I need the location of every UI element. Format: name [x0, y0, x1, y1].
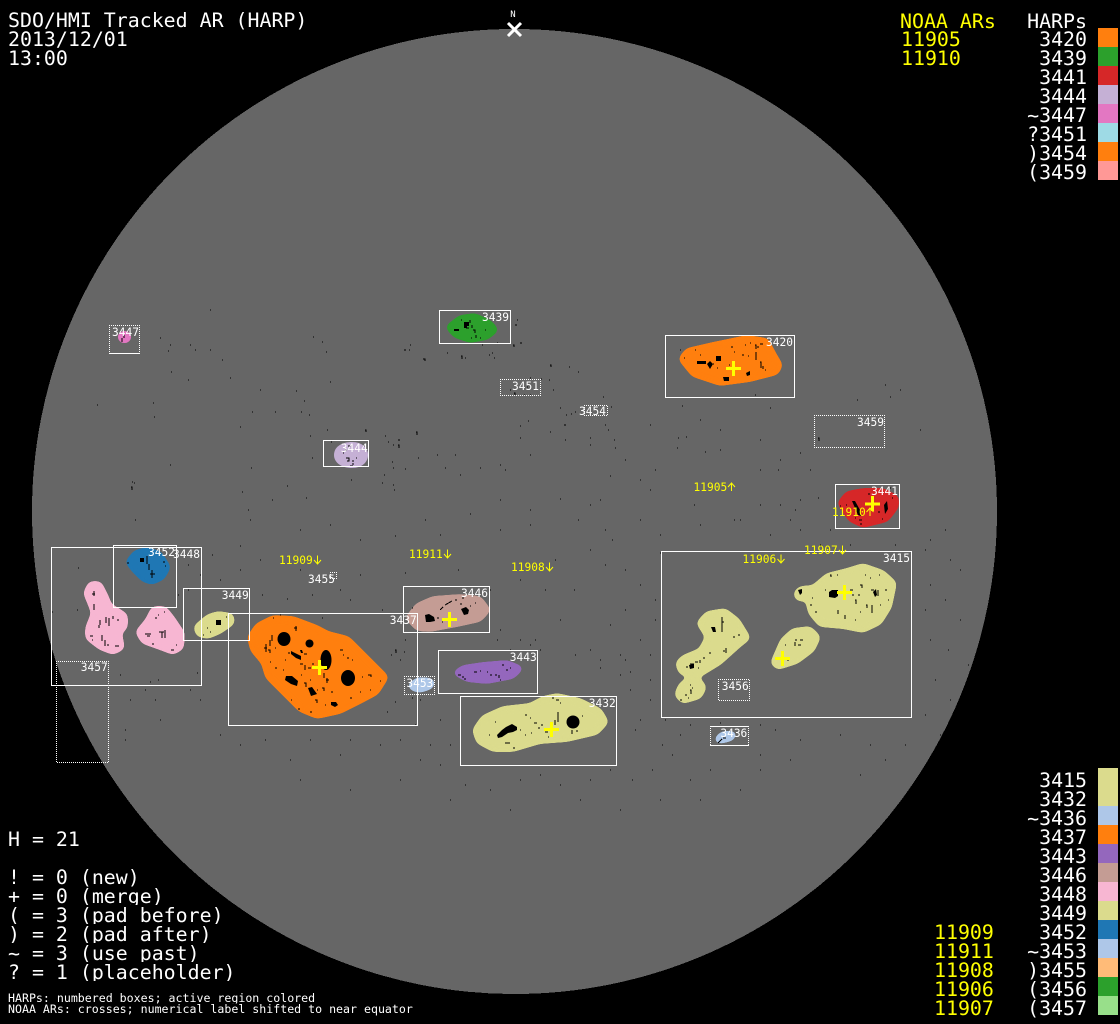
box 3432	[460, 696, 616, 766]
HARP numeric labels: 3447	[112, 326, 139, 339]
HARPs list bottom right: (3457	[1027, 997, 1087, 1020]
box 3447	[109, 326, 140, 354]
NOAA AR labels: 11910	[832, 506, 866, 519]
box 3437	[228, 614, 418, 726]
box 3420	[666, 336, 794, 398]
HARPs list bottom right: (3456	[1027, 978, 1087, 1001]
HARPs list top right: ?3451	[1027, 123, 1087, 146]
HARP numeric labels: 3456	[722, 680, 749, 693]
HARP numeric labels: 3457	[81, 661, 108, 674]
footnote: NOAA ARs: crosses; numerical label shifted to near equator	[8, 1002, 413, 1016]
sunspot specks scattered across disk	[52, 310, 969, 810]
title block: SDO/HMI Tracked AR (HARP)	[8, 9, 307, 32]
yellow cross NOAA 11907	[837, 585, 852, 600]
north pole marker: N	[510, 10, 516, 20]
box 3443	[438, 650, 538, 694]
yellow cross NOAA 11910	[865, 496, 880, 511]
box 3452	[114, 546, 176, 608]
status code key: ! = 0 (new)	[8, 866, 140, 889]
HARP numeric labels	[81, 311, 910, 740]
active region 3446 with yellow cross	[407, 596, 489, 630]
yellow cross	[544, 722, 559, 737]
box 3459	[814, 416, 884, 448]
footnote: HARPs: numbered boxes; active region colored	[8, 991, 315, 1005]
box 3455	[330, 572, 336, 578]
HARP numeric labels: 3444	[341, 442, 368, 455]
HARP numeric labels: 3453	[406, 677, 433, 690]
NOAA ARs list top right	[900, 10, 996, 70]
HARP numeric labels: 3436	[720, 727, 748, 740]
status code key	[0, 866, 240, 986]
active region 3441 with yellow cross	[839, 490, 897, 526]
NOAA label direction arrows	[314, 482, 874, 571]
HARP numeric labels: 3455	[308, 573, 335, 586]
HARPs list top right: 3444	[1039, 85, 1087, 108]
NOAA ARs list bottom right: 11909	[934, 921, 994, 944]
NOAA ARs list bottom right: 11911	[934, 940, 994, 963]
box 3446	[404, 586, 490, 632]
HARP numeric labels: 3452	[148, 546, 175, 559]
H count: H = 21	[8, 828, 80, 851]
HARPs list bottom right: 3446	[1039, 864, 1087, 887]
active region 3447	[118, 331, 131, 343]
HARPs list bottom right: 3443	[1039, 845, 1087, 868]
active region 3449	[195, 613, 233, 637]
HARP numeric labels: 3454	[579, 405, 606, 418]
active region 3443	[454, 662, 522, 682]
HARP numeric labels: 3443	[510, 651, 537, 664]
active region 3453	[409, 679, 433, 691]
north pole marker	[508, 10, 521, 36]
NOAA AR labels: 11907	[804, 544, 838, 557]
HARPs list bottom right: 3437	[1039, 826, 1087, 849]
NOAA AR labels	[279, 481, 866, 574]
cluster specks between regions	[168, 320, 612, 498]
box 3453	[404, 676, 434, 694]
HARPs list bottom right: 3415	[1039, 769, 1087, 792]
footnote	[0, 991, 413, 1016]
HARP numeric labels: 3437	[390, 614, 417, 627]
NOAA AR labels: 11905	[694, 481, 727, 494]
NOAA ARs list top right: 11905	[901, 28, 961, 51]
colour swatches bottom right	[1098, 768, 1118, 1015]
HARP numeric labels: 3451	[512, 380, 539, 393]
HARPs list top right: )3454	[1027, 142, 1087, 165]
NOAA ARs list top right: 11910	[901, 47, 961, 70]
active region 3448	[85, 583, 183, 653]
box 3439	[440, 310, 510, 344]
HARP numeric labels: 3459	[857, 416, 884, 429]
status code key: ( = 3 (pad before)	[8, 904, 224, 927]
HARPs list top right	[1027, 10, 1087, 184]
NOAA AR labels: 11911	[409, 548, 443, 561]
HARPs list bottom right: 3449	[1039, 902, 1087, 925]
NOAA AR labels: 11909	[279, 554, 313, 567]
status code key: ~ = 3 (use past)	[8, 942, 200, 965]
HARPs list bottom right: ~3453	[1027, 940, 1087, 963]
HARP numeric labels: 3439	[482, 311, 509, 324]
HARP boxes and labels	[52, 310, 912, 766]
HARP numeric labels: 3446	[461, 587, 488, 600]
yellow cross HARP 3437	[312, 660, 327, 675]
title block	[8, 9, 307, 70]
status code key: ) = 2 (pad after)	[8, 923, 212, 946]
NOAA ARs list bottom right	[934, 921, 994, 1020]
NOAA AR labels: 11906	[742, 553, 776, 566]
HARPs list bottom right: ~3436	[1027, 807, 1087, 830]
title block: 2013/12/01	[8, 28, 128, 51]
HARPs list bottom right: 3432	[1039, 788, 1087, 811]
active region 3415 with yellow crosses	[676, 565, 895, 702]
active region 3439	[447, 315, 497, 341]
HARPs list top right: 3441	[1039, 66, 1087, 89]
NOAA ARs list bottom right: 11907	[934, 997, 994, 1020]
HARPs list top right: (3459	[1027, 161, 1087, 184]
box 3444	[324, 440, 368, 466]
box 3448	[52, 548, 202, 686]
yellow cross	[442, 612, 457, 627]
NOAA ARs list top right: NOAA ARs	[900, 10, 996, 33]
box 3436	[710, 726, 749, 746]
HARPs list bottom right: )3455	[1027, 959, 1087, 982]
active region 3432 with yellow cross	[474, 695, 607, 750]
HARPs list top right: 3439	[1039, 47, 1087, 70]
HARP numeric labels: 3441	[871, 485, 898, 498]
NOAA ARs list bottom right: 11906	[934, 978, 994, 1001]
yellow cross NOAA 11905	[726, 361, 741, 376]
status code key: ? = 1 (placeholder)	[8, 961, 236, 984]
NOAA AR labels: 11908	[511, 561, 545, 574]
colour swatches top right	[1098, 28, 1118, 180]
HARPs list top right: HARPs	[1027, 10, 1087, 33]
HARPs list bottom right: 3452	[1039, 921, 1087, 944]
HARP numeric labels: 3420	[766, 336, 793, 349]
HARPs list bottom right	[1027, 769, 1087, 1020]
yellow cross NOAA 11906	[775, 651, 790, 666]
title block: 13:00	[8, 47, 68, 70]
active region 3452	[127, 549, 169, 583]
active region 3444	[334, 442, 368, 468]
HARP numeric labels: 3432	[589, 697, 616, 710]
HARPs list top right: ~3447	[1027, 104, 1087, 127]
box 3449	[184, 588, 250, 640]
box 3451	[500, 380, 540, 396]
active region 3437 with yellow cross	[249, 615, 387, 717]
active region 3436	[715, 733, 736, 743]
HARP numeric labels: 3415	[883, 552, 910, 565]
box 3454	[584, 406, 608, 416]
HARP numeric labels: 3449	[222, 589, 249, 602]
box 3441	[836, 484, 900, 528]
HARP numeric labels: 3448	[173, 548, 200, 561]
HARPs list bottom right: 3448	[1039, 883, 1087, 906]
box 3456	[718, 680, 750, 700]
NOAA ARs list bottom right: 11908	[934, 959, 994, 982]
active region 3420 with yellow cross	[680, 337, 781, 384]
box 3415	[662, 552, 912, 718]
status code key: + = 0 (merge)	[8, 885, 164, 908]
box 3457	[56, 662, 108, 762]
HARPs list top right: 3420	[1039, 28, 1087, 51]
